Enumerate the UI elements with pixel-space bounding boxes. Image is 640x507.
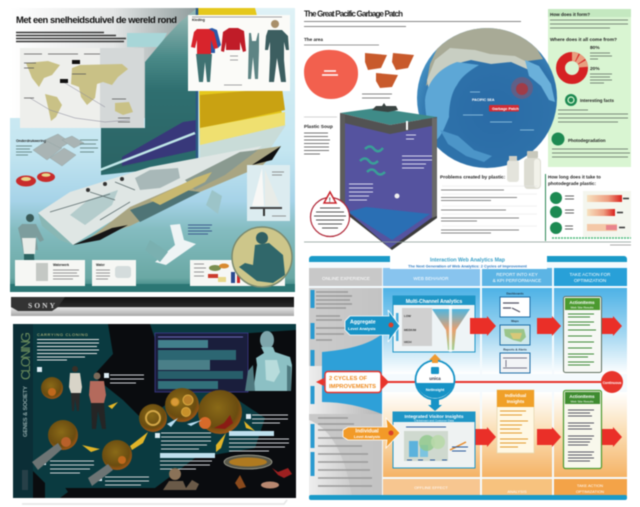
action box lower xyxy=(564,390,602,468)
blue text panel xyxy=(155,333,248,392)
vertical heading: GENES & SOCIETY xyxy=(23,386,29,437)
credit xyxy=(610,244,631,246)
column headers: OPTIMIZATION xyxy=(574,278,606,283)
action box upper xyxy=(564,296,602,372)
garbage patch label: Garbage Patch xyxy=(492,107,519,111)
continuous end circle: Continuous xyxy=(603,381,622,385)
arrow: aggregate level analysis: Aggregate xyxy=(350,320,376,326)
red arrows upper row xyxy=(470,316,622,336)
clothing panel: Kleding xyxy=(192,18,205,22)
action box upper: ActionItems xyxy=(569,300,595,305)
footer rule xyxy=(304,241,631,243)
captions xyxy=(50,375,289,485)
individual insights box xyxy=(497,390,534,453)
sidebar: how does it form xyxy=(548,9,631,167)
bottles xyxy=(507,151,541,189)
report thumbnails xyxy=(500,292,530,373)
arrow: individual level analysis: Individual xyxy=(355,428,379,434)
box: water: Water xyxy=(96,263,105,267)
multi-channel analytics box xyxy=(393,296,475,352)
garbage patch label xyxy=(489,105,519,112)
cycles label: 2 CYCLES OF xyxy=(329,376,367,382)
action box upper: Web Site Results xyxy=(571,306,594,310)
researchers xyxy=(163,468,199,490)
plastic swirls xyxy=(360,146,385,174)
bottom row labels: TAKE ACTION xyxy=(577,483,603,488)
arrow: aggregate level analysis xyxy=(345,310,400,342)
icon: photodegradation xyxy=(552,132,564,146)
box: water maker: Waterwerk xyxy=(53,263,69,267)
red cycle line xyxy=(318,381,612,383)
integrated visitor insights box: Integrated Visitor Insights xyxy=(404,414,464,420)
yellow process arrows xyxy=(82,402,255,452)
pacific label: PACIFIC SEA xyxy=(472,98,495,102)
report thumbnails: Dashboards xyxy=(506,292,524,296)
central hub circle: NetInsight xyxy=(426,388,445,392)
battery text: Onderdrukwering xyxy=(16,139,46,143)
blue and orange rows xyxy=(383,268,627,496)
arrow: individual level analysis: Level Analysis xyxy=(354,435,380,439)
problems section: Problems created by plastic: xyxy=(440,174,506,180)
map title: The Next Generation of Web Analytics: 2 Cycles of Improvement xyxy=(408,263,528,268)
bottom band xyxy=(309,495,627,500)
plastic soup text xyxy=(304,117,337,154)
intro text xyxy=(304,22,521,26)
report thumbnails: Reports & Alerts xyxy=(503,348,527,352)
bottom row labels: ANALYSIS xyxy=(507,489,527,494)
title: garbage patch: The Great Pacific Garbage Patch xyxy=(304,10,403,18)
red area circle xyxy=(304,50,358,99)
warning callout: ! xyxy=(329,198,331,204)
area subtext xyxy=(304,44,379,46)
sail plan inset xyxy=(247,165,290,221)
circle portrait xyxy=(232,227,292,287)
action box lower: Web Site Results xyxy=(571,400,594,404)
red arrows lower row xyxy=(470,427,622,447)
keel and rudder xyxy=(145,190,222,265)
photodegrade chart xyxy=(546,174,631,241)
cycles label: IMPROVEMENTS xyxy=(329,384,376,390)
warning callout xyxy=(310,192,350,236)
ship xyxy=(372,103,398,112)
white process arrows xyxy=(167,418,202,427)
gray online experience column xyxy=(309,268,382,496)
vertical heading xyxy=(18,332,33,437)
title: boat panel: Met een snelheidsduivel de wereld rond xyxy=(16,14,177,25)
icon: interesting facts xyxy=(565,94,577,106)
panel: web analytics map xyxy=(309,256,627,500)
multi-channel analytics box: Multi-Channel Analytics xyxy=(406,299,462,305)
integrated visitor insights box: Clickstream and Customer Data xyxy=(414,418,454,422)
report thumbnails: Maps xyxy=(511,319,519,323)
panel: sailing boat infographic xyxy=(10,8,295,292)
arrow: aggregate level analysis: Level Analysis xyxy=(348,326,376,331)
bottom row labels: OPTIMIZATION xyxy=(576,489,604,494)
sony logo text: SONY xyxy=(28,301,56,310)
map title xyxy=(390,256,547,269)
sidebar: how does it form: How does it form? xyxy=(550,12,590,17)
column headers: REPORT INTO KEY xyxy=(496,272,538,277)
photodegradation heading: Photodegradation xyxy=(568,138,606,143)
icon squares xyxy=(37,367,251,481)
interesting facts heading: Interesting facts xyxy=(580,98,614,103)
clothing panel xyxy=(188,15,290,91)
area heading: The area xyxy=(304,37,323,42)
top band xyxy=(309,256,627,262)
batteries xyxy=(33,134,84,166)
map title: Interaction Web Analytics Map xyxy=(430,258,505,264)
integrated visitor insights box xyxy=(393,412,475,468)
cloning heading: CARRYING CLONING xyxy=(37,332,89,337)
column headers: & KPI PERFORMANCE xyxy=(493,278,541,283)
sony banner xyxy=(11,297,294,316)
globe xyxy=(417,28,557,168)
sources heading: Where does it all come from? xyxy=(550,37,617,43)
bottom row labels: OFFLINE EFFECT xyxy=(414,485,448,490)
world map xyxy=(20,48,144,128)
page shadow under cloning xyxy=(22,500,287,504)
box: water maker xyxy=(15,260,85,286)
individual insights box: Insights xyxy=(507,399,525,404)
woman figure xyxy=(69,366,82,411)
cell stages xyxy=(32,377,242,486)
photodegradation text xyxy=(552,149,630,157)
spain shapes xyxy=(365,53,414,88)
battery text xyxy=(16,139,98,155)
continuous end circle xyxy=(601,371,623,393)
central hub circle: unica xyxy=(429,376,441,381)
action box lower: ActionItems xyxy=(569,394,595,399)
cycles label xyxy=(316,372,389,392)
keel text xyxy=(188,225,212,234)
sailor figure xyxy=(18,214,44,274)
man figure xyxy=(89,372,106,429)
red life rafts xyxy=(16,172,55,186)
column headers xyxy=(322,272,611,283)
facts text xyxy=(558,110,628,122)
intro text xyxy=(16,32,126,42)
box: water xyxy=(92,260,136,286)
cloning intro text xyxy=(37,340,99,360)
human bust xyxy=(245,331,292,391)
multi-channel analytics box: HIGH xyxy=(404,340,412,344)
boat hull cutaway xyxy=(38,146,281,245)
panel: cloning infographic xyxy=(13,324,296,498)
ocean cube xyxy=(340,103,437,250)
plastic soup text: Plastic Soup xyxy=(304,124,333,130)
panel: garbage patch infographic xyxy=(304,9,631,250)
vertical heading: CLONING xyxy=(18,332,33,380)
column headers: WEB BEHAVIOR xyxy=(413,276,449,281)
multi-channel analytics box: MEDIUM xyxy=(404,328,417,332)
source stats: 20% xyxy=(590,66,600,72)
box: food xyxy=(190,260,285,286)
source stats: 80% xyxy=(590,45,600,51)
individual insights box: Individual xyxy=(505,393,526,398)
petri dish xyxy=(224,455,292,489)
cube labels xyxy=(349,135,432,200)
multi-channel analytics box: LOW xyxy=(404,314,411,318)
problems section xyxy=(440,174,537,233)
central hub circle xyxy=(416,354,454,411)
cyan label bars xyxy=(160,431,274,458)
donut chart xyxy=(560,56,584,80)
area caption xyxy=(362,94,392,98)
bottom row labels xyxy=(414,483,604,494)
column headers: ONLINE EXPERIENCE xyxy=(322,276,370,281)
photodegrade chart: How long does it take to xyxy=(548,174,601,180)
photodegrade chart: photodegrade plastic: xyxy=(548,181,596,186)
arrow: individual level analysis xyxy=(343,418,400,448)
column headers: TAKE ACTION FOR xyxy=(569,272,611,277)
source stats xyxy=(590,45,612,83)
